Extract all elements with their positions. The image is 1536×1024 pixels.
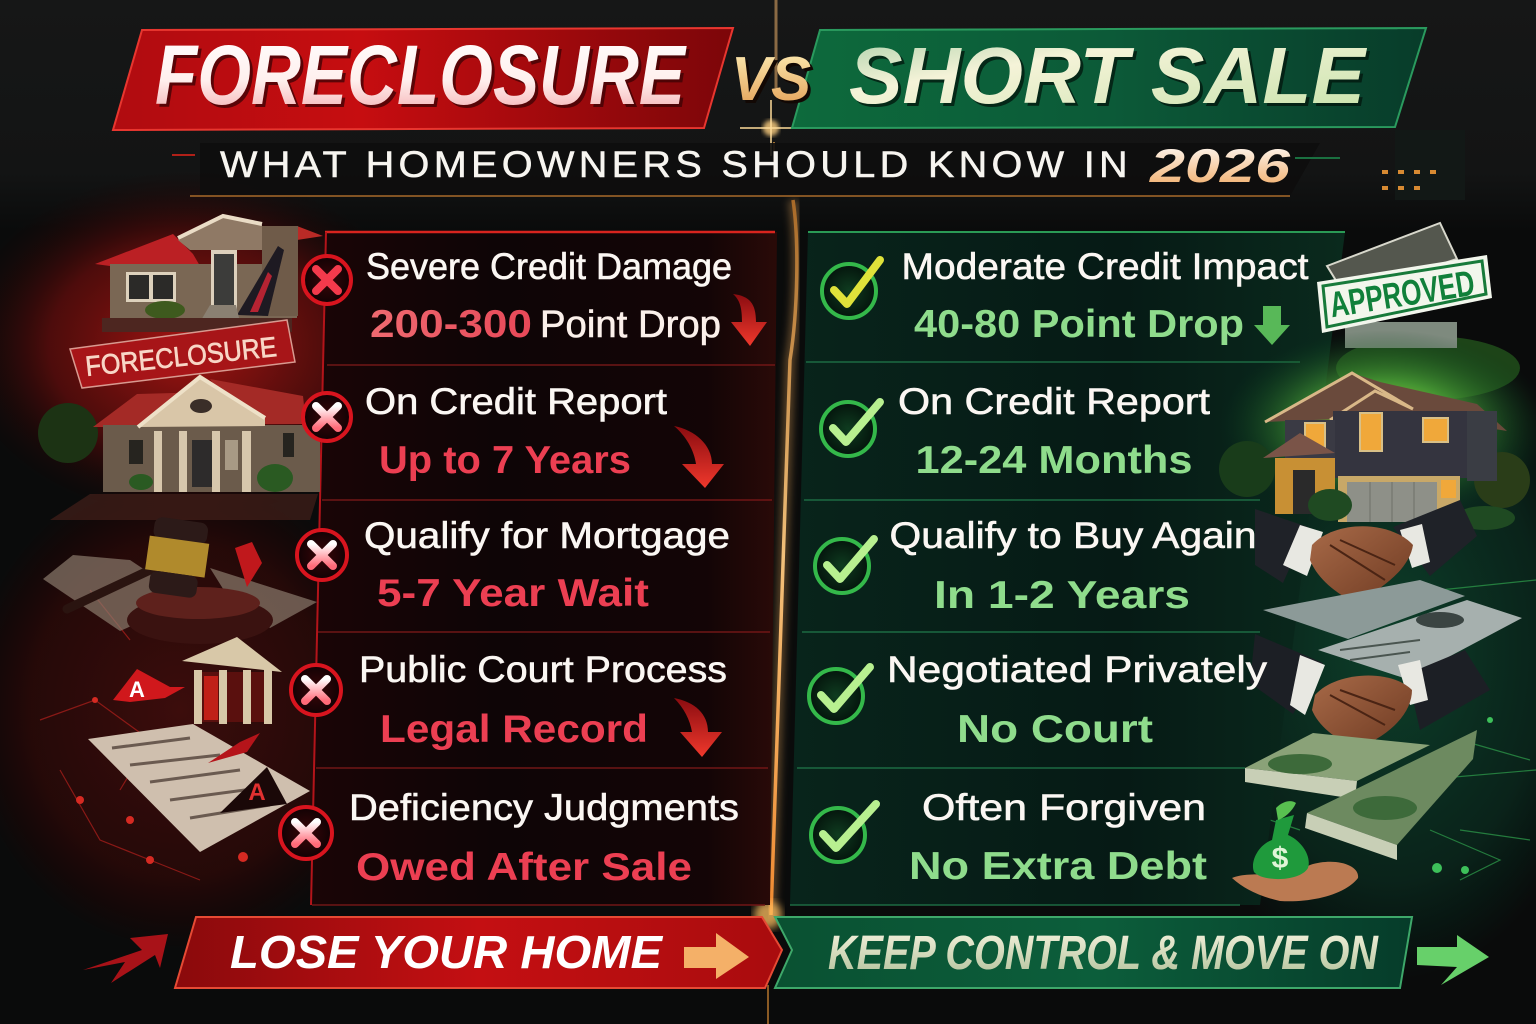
row: credit impact bbox=[822, 246, 1309, 346]
row: qualify buy again bbox=[815, 515, 1256, 617]
row: on credit report: On Credit Report bbox=[365, 381, 668, 422]
row: credit damage bbox=[303, 246, 767, 346]
icon: check mark bbox=[821, 402, 880, 456]
row: qualify buy again: In 1-2 Years bbox=[934, 574, 1190, 617]
row: deficiency bbox=[280, 787, 739, 889]
row: qualify mortgage: Qualify for Mortgage bbox=[364, 515, 730, 556]
row: public court bbox=[291, 649, 727, 757]
illustration: lower colonial house bbox=[38, 377, 320, 520]
title banner: short sale: SHORT SALE bbox=[849, 31, 1368, 120]
row: credit damage: Point Drop bbox=[540, 304, 721, 346]
title banner: foreclosure: FORECLOSURE bbox=[155, 28, 687, 122]
illustration: approved stamp: APPROVED bbox=[1327, 262, 1477, 325]
rows: short sale bbox=[809, 246, 1309, 888]
illustration: upper handshake bbox=[1255, 500, 1477, 603]
icon: money bag in hand bbox=[1232, 801, 1358, 901]
arrow: red decorative left bbox=[83, 934, 168, 983]
illustration: upper foreclosed house bbox=[95, 216, 323, 332]
icon: x mark bbox=[303, 393, 351, 441]
row: qualify mortgage bbox=[297, 515, 730, 615]
illustration: legal document bbox=[88, 724, 310, 852]
icon: check mark bbox=[822, 260, 880, 318]
row: public court: Public Court Process bbox=[359, 649, 727, 690]
row: deficiency: Owed After Sale bbox=[356, 846, 692, 889]
row: qualify mortgage: 5-7 Year Wait bbox=[377, 572, 649, 615]
illustration: gavel and papers bbox=[43, 516, 317, 644]
row: public court: Legal Record bbox=[380, 708, 648, 751]
banner: keep control: KEEP CONTROL & MOVE ON bbox=[828, 927, 1379, 980]
row: forgiven: Often Forgiven bbox=[922, 787, 1206, 828]
row: deficiency: Deficiency Judgments bbox=[349, 787, 739, 828]
row: on credit report: 12-24 Months bbox=[916, 439, 1192, 482]
subtitle: WHAT HOMEOWNERS SHOULD KNOW IN bbox=[220, 144, 1132, 185]
illustration: legal document: A bbox=[248, 779, 266, 806]
vs label: VS bbox=[734, 48, 814, 117]
row: on credit report: Up to 7 Years bbox=[379, 439, 631, 482]
subtitle bbox=[172, 139, 1340, 196]
arrow: orange right bbox=[684, 933, 749, 979]
icon: x mark bbox=[291, 665, 341, 715]
center divider bbox=[740, 0, 802, 1024]
row: qualify buy again: Qualify to Buy Again bbox=[890, 515, 1256, 556]
row: negotiated: Negotiated Privately bbox=[887, 649, 1268, 690]
panel: short sale background bbox=[790, 232, 1345, 905]
rows: foreclosure bbox=[280, 246, 767, 889]
icon: x mark bbox=[297, 530, 347, 580]
illustration: contract documents bbox=[1263, 580, 1522, 679]
banner: lose your home bbox=[175, 917, 782, 988]
row: credit impact: Moderate Credit Impact bbox=[902, 246, 1309, 287]
row: on credit report bbox=[821, 381, 1211, 482]
icon: x mark bbox=[280, 807, 332, 859]
row: credit damage: Severe Credit Damage bbox=[366, 246, 732, 287]
icon: x mark bbox=[303, 256, 351, 304]
banner: lose your home: LOSE YOUR HOME bbox=[230, 926, 663, 978]
row: on credit report: On Credit Report bbox=[898, 381, 1211, 422]
icon: money bag in hand: $ bbox=[1272, 842, 1289, 875]
subtitle: 2026 bbox=[1149, 139, 1291, 192]
illustration: lower handshake bbox=[1250, 634, 1490, 748]
illustration: approved stamp bbox=[1317, 223, 1520, 400]
vs label: VS bbox=[731, 45, 811, 114]
title banner: short sale: SHORT SALE bbox=[852, 34, 1371, 123]
row: forgiven: No Extra Debt bbox=[909, 845, 1207, 888]
illustration: courthouse and warning flag: A bbox=[129, 677, 145, 702]
banner: keep control bbox=[775, 917, 1412, 988]
illustration: courthouse and warning flag bbox=[113, 637, 282, 724]
title banner: foreclosure: FORECLOSURE bbox=[158, 31, 690, 125]
illustration: cash stacks bbox=[1245, 730, 1477, 860]
row: forgiven bbox=[811, 787, 1207, 888]
icon: check mark bbox=[815, 539, 874, 593]
row: credit damage: 200-300 bbox=[370, 303, 532, 346]
row: negotiated bbox=[809, 649, 1268, 751]
row: on credit report bbox=[303, 381, 724, 488]
row: negotiated: No Court bbox=[957, 708, 1153, 751]
sign: foreclosure: FORECLOSURE bbox=[84, 331, 278, 382]
icon: check mark bbox=[809, 667, 870, 723]
icon: check mark bbox=[811, 804, 876, 862]
panel: foreclosure background bbox=[311, 232, 777, 905]
arrow: green right bbox=[1417, 935, 1489, 985]
illustration: modern house bbox=[1219, 330, 1536, 530]
row: credit impact: 40-80 Point Drop bbox=[914, 303, 1244, 346]
